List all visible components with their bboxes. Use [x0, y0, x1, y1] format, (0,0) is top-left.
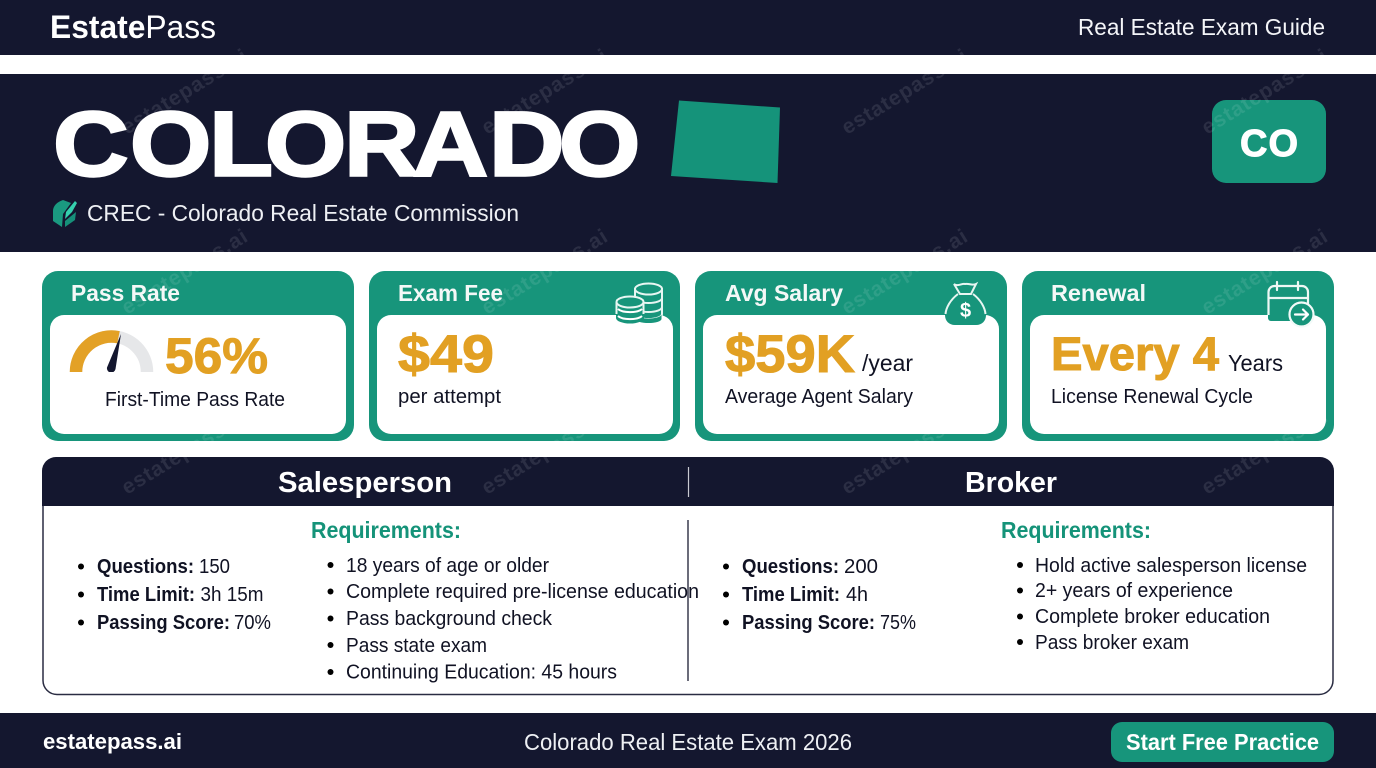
- broker exam facts: 75%: [880, 612, 916, 634]
- watermarks: [118, 45, 1332, 499]
- state badge: [1212, 100, 1326, 183]
- column heading: salesperson: Salesperson: [278, 467, 452, 499]
- watermarks: estatepass.ai: [1198, 45, 1332, 139]
- watermarks: estatepass.ai: [838, 45, 972, 139]
- logo: EstatePass: [50, 9, 216, 45]
- state shape: [671, 100, 780, 183]
- column heading: broker: Broker: [965, 467, 1057, 499]
- card heading: Exam Fee: [398, 280, 503, 306]
- salary label: Average Agent Salary: [725, 386, 913, 408]
- icon: commission leaf shield: [53, 200, 77, 227]
- renewal label: License Renewal Cycle: [1051, 386, 1253, 408]
- card: pass rate: [42, 271, 354, 441]
- watermarks: estatepass.ai: [118, 405, 252, 499]
- salesperson exam facts: 150: [199, 556, 230, 578]
- footer title: Colorado Real Estate Exam 2026: [524, 729, 852, 755]
- salesperson requirements: Complete required pre-license education: [346, 581, 699, 603]
- card: exam fee: [369, 271, 680, 441]
- pass rate value: 56%: [165, 328, 268, 384]
- icon: money bag: $: [960, 300, 971, 322]
- guide label: Real Estate Exam Guide: [1078, 14, 1325, 40]
- salesperson exam facts: Questions:: [97, 556, 194, 578]
- card heading: Renewal: [1051, 280, 1146, 306]
- salesperson requirements: Continuing Education: 45 hours: [346, 662, 617, 684]
- renewal unit: Years: [1228, 350, 1283, 376]
- fee label: per attempt: [398, 386, 501, 408]
- footer bar: [0, 713, 1376, 768]
- site name: estatepass.ai: [43, 729, 182, 754]
- icon: calendar with arrow: [1268, 282, 1314, 326]
- comparison table: [42, 457, 1334, 694]
- watermarks: estatepass.ai: [118, 225, 252, 319]
- hero banner: [0, 74, 1376, 252]
- watermarks: estatepass.ai: [838, 225, 972, 319]
- salesperson requirements: Pass state exam: [346, 635, 487, 657]
- watermarks: estatepass.ai: [1198, 225, 1332, 319]
- top bar: [0, 0, 1376, 55]
- state badge: CO: [1240, 123, 1298, 165]
- broker exam facts: 4h: [846, 584, 868, 606]
- icon: money bag: [945, 284, 986, 325]
- broker exam facts: Questions:: [742, 556, 839, 578]
- salesperson exam facts: [78, 556, 271, 634]
- gauge: [76, 334, 147, 373]
- salary unit: /year: [862, 350, 913, 376]
- broker requirements: Hold active salesperson license: [1035, 555, 1307, 577]
- broker exam facts: [723, 556, 916, 634]
- salesperson requirements: Requirements:: [311, 517, 461, 543]
- broker requirements: Complete broker education: [1035, 606, 1270, 628]
- card: average salary: [695, 271, 1007, 441]
- renewal value: Every 4: [1051, 327, 1219, 380]
- salesperson requirements: Pass background check: [346, 608, 553, 630]
- broker exam facts: Time Limit:: [742, 584, 840, 606]
- watermarks: estatepass.ai: [838, 405, 972, 499]
- watermarks: estatepass.ai: [478, 225, 612, 319]
- salesperson requirements: [311, 517, 699, 684]
- card: renewal: [1022, 271, 1334, 441]
- salesperson exam facts: 70%: [234, 612, 271, 634]
- broker exam facts: 200: [844, 556, 878, 578]
- salesperson exam facts: 3h 15m: [200, 584, 264, 606]
- watermarks: estatepass.ai: [478, 405, 612, 499]
- call to action button: [1111, 722, 1334, 762]
- card heading: Pass Rate: [71, 280, 180, 306]
- salary value: $59K: [725, 325, 855, 384]
- broker requirements: Requirements:: [1001, 517, 1151, 543]
- salesperson requirements: 18 years of age or older: [346, 555, 549, 577]
- watermarks: estatepass.ai: [118, 45, 252, 139]
- salesperson exam facts: Passing Score:: [97, 612, 230, 634]
- call to action button: Start Free Practice: [1126, 729, 1319, 755]
- broker requirements: Pass broker exam: [1035, 632, 1189, 654]
- broker requirements: 2+ years of experience: [1035, 580, 1233, 602]
- watermarks: estatepass.ai: [1198, 405, 1332, 499]
- salesperson exam facts: Time Limit:: [97, 584, 195, 606]
- state name: COLORADO: [53, 92, 641, 195]
- pass rate label: First-Time Pass Rate: [105, 389, 285, 411]
- broker exam facts: Passing Score:: [742, 612, 875, 634]
- broker requirements: [1001, 517, 1307, 654]
- watermarks: estatepass.ai: [478, 45, 612, 139]
- fee value: $49: [398, 325, 494, 384]
- commission name: CREC - Colorado Real Estate Commission: [87, 200, 519, 226]
- icon: coin stacks: [616, 284, 662, 324]
- card heading: Avg Salary: [725, 280, 843, 306]
